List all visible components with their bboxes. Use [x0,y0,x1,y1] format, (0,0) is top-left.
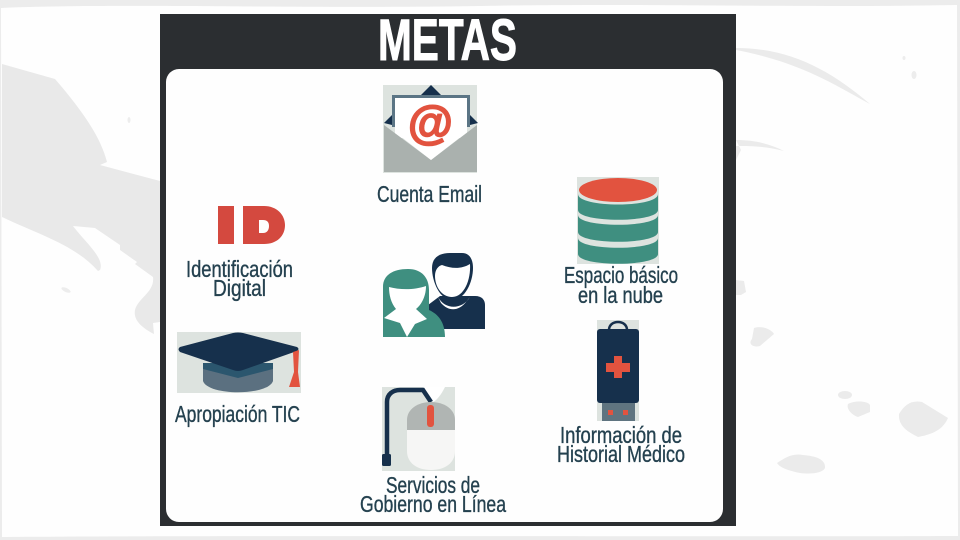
label: Información de Historial Médico: Información de [560,422,682,448]
icon: graduation cap [177,332,301,393]
panel: metas [160,8,736,526]
label: Servicios de Gobierno en Línea [360,472,506,517]
icon: email envelope: @ [408,96,453,148]
icon: people [383,253,485,337]
label: Espacio básico en la nube: Espacio básico [564,262,678,288]
label: Servicios de Gobierno en Línea: Servicios de [386,472,480,498]
icon: ID [218,206,285,244]
label: Identificación Digital [186,256,293,301]
label: Espacio básico en la nube [564,262,678,308]
icon: mouse [382,387,455,471]
label: Información de Historial Médico [557,422,685,467]
icon: medical USB drive [597,320,639,421]
label: Espacio básico en la nube: en la nube [578,282,663,308]
label: Identificación Digital: Identificación [186,256,293,282]
label: Identificación Digital: Digital [213,275,266,301]
label: Apropiación TIC: Apropiación TIC [175,401,300,427]
icon: database [577,177,659,264]
icon: email envelope [383,85,478,173]
label: Cuenta Email: Cuenta Email [377,181,482,207]
label: Servicios de Gobierno en Línea: Gobierno en Línea [360,491,506,517]
label: Información de Historial Médico: Historial Médico [557,441,685,467]
title: METAS [378,8,517,73]
